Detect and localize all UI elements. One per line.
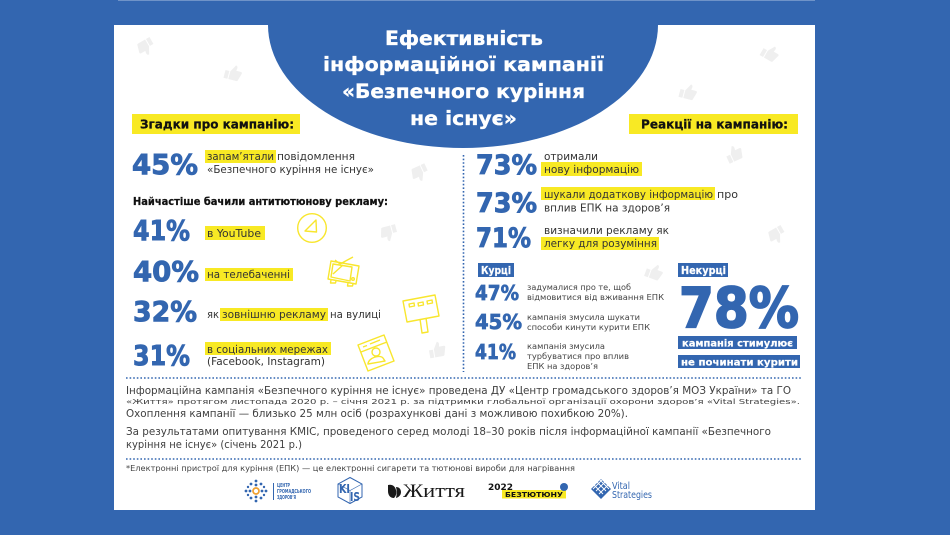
stat: 45% remembered: «Безпечного куріння не існує» — [207, 164, 374, 176]
stat: 47% smokers: відмовитися від вживання ЕПК — [527, 293, 664, 302]
stat: 71% easy: визначили рекламу як — [544, 226, 669, 237]
icon: television — [328, 257, 359, 286]
divider: vertical dotted — [462, 155, 464, 372]
logo: KIIS: KI — [339, 482, 350, 496]
logo: KIIS: IS — [350, 490, 360, 504]
stat: 73% new info — [476, 150, 642, 181]
text block: campaign description: Охоплення кампанії — близько 25 млн осіб (розрахункові дані з можливою похибкою 20%). — [126, 408, 628, 420]
stat: 41% smokers — [475, 340, 629, 371]
stat: 41% YouTube: в YouTube — [207, 229, 261, 240]
title banner: не існує» — [410, 107, 517, 130]
stat: 32% outdoor: на вулиці — [330, 309, 381, 321]
icon: play button — [298, 214, 326, 242]
logo: 2022 tobacco free: БЕЗТЮТЮНУ — [505, 491, 564, 499]
stat: 73% sought info: 73% — [476, 188, 537, 219]
stat: 73% new info: 73% — [476, 150, 537, 181]
logo: public health center: ГРОМАДСЬКОГО — [277, 489, 311, 495]
stat: 45% smokers: способи кинути курити ЕПК — [527, 323, 650, 332]
stat: 45% remembered: повідомлення — [277, 151, 355, 163]
stat: 31% social: 31% — [133, 339, 190, 372]
panel: white card — [114, 25, 815, 510]
stat: 78% non-smokers — [678, 276, 800, 368]
stat: 45% remembered: 45% — [132, 148, 198, 181]
stat: 41% YouTube: 41% — [133, 214, 190, 247]
text block: campaign description — [126, 385, 800, 451]
stat: 31% social — [133, 339, 331, 372]
stat: 78% non-smokers: не починати курити — [681, 358, 798, 368]
subheading: most seen: Найчастіше бачили антитютюнову рекламу: — [133, 196, 388, 208]
stat: 71% easy: легку для розуміння — [544, 238, 657, 250]
stat: 71% easy — [476, 223, 669, 254]
stat: 73% new info: отримали — [544, 152, 598, 163]
stat: 32% outdoor: зовнішню рекламу — [222, 309, 326, 321]
stat: 78% non-smokers: кампанія стимулює — [682, 338, 793, 350]
text block: campaign description: «Життя» протягом листопада 2020 р. – січня 2021 р. за підтримки глобальної організації охорони здоров’я «Vital Strategies». — [126, 397, 800, 406]
stat: 47% smokers — [475, 281, 664, 305]
stat: 45% remembered — [132, 148, 374, 181]
title banner: інформаційної кампанії — [323, 53, 604, 76]
stat: 73% sought info: шукали додаткову інформацію — [544, 189, 713, 201]
stat: 71% easy: 71% — [476, 223, 531, 254]
logo: public health center — [245, 480, 311, 502]
text block: campaign description: куріння не існує» (січень 2021 р.) — [126, 439, 302, 451]
stat: 41% smokers: ЕПК на здоров’я — [527, 362, 598, 371]
label: non-smokers: Некурці — [681, 265, 726, 277]
stat: 47% smokers: 47% — [475, 281, 519, 305]
stat: 32% outdoor — [133, 295, 381, 328]
logo: Zhyttia: Життя — [403, 481, 465, 502]
title banner: Ефективність — [385, 27, 543, 50]
icons: background thumbs — [135, 37, 788, 358]
heading: mentions — [132, 114, 300, 134]
stat: 32% outdoor: 32% — [133, 295, 197, 328]
icon: billboard — [403, 295, 439, 333]
stat: 31% social: (Facebook, Instagram) — [207, 357, 325, 368]
logo: Vital Strategies: Strategies — [612, 490, 652, 501]
title banner — [268, 25, 658, 148]
stat: 47% smokers: задумалися про те, щоб — [527, 283, 631, 292]
logo: 2022 tobacco free: 2022 — [488, 483, 513, 493]
stat: 40% TV: 40% — [133, 255, 199, 288]
text block: campaign description: За результатами опитування КМІС, проведеного серед молоді 18–30 років після інформаційної кампанії «Безпечного — [126, 426, 771, 438]
icon: profile window — [358, 335, 394, 371]
heading: reactions — [629, 114, 798, 134]
logo: Zhyttia — [388, 481, 465, 502]
logo: 2022 tobacco free — [488, 483, 568, 499]
stat: 41% YouTube — [133, 214, 265, 247]
heading: reactions: Реакції на кампанію: — [641, 118, 788, 132]
logo: public health center: ЗДОРОВ’Я — [277, 495, 296, 501]
title banner: «Безпечного куріння — [342, 80, 585, 103]
stat: 73% new info: нову інформацію — [544, 164, 639, 176]
stat: 78% non-smokers: 78% — [679, 276, 799, 340]
stat: 40% TV: на телебаченні — [207, 269, 290, 281]
stat: 31% social: в соціальних мережах — [207, 344, 328, 356]
stat: 73% sought info — [476, 187, 738, 219]
stat: 41% smokers: турбуватися про вплив — [527, 352, 629, 361]
logo: Vital Strategies: Vital — [612, 481, 630, 492]
stat: 45% remembered: запам’ятали — [207, 152, 274, 163]
stat: 41% smokers: кампанія змусила — [527, 342, 605, 351]
logo: KIIS — [338, 478, 362, 504]
stat: 73% sought info: вплив ЕПК на здоров’я — [544, 204, 670, 214]
stat: 45% smokers: 45% — [475, 310, 522, 334]
stat: 40% TV — [133, 255, 293, 288]
logo: public health center: ЦЕНТР — [277, 483, 290, 489]
stat: 73% sought info: про — [717, 190, 738, 201]
stat: 32% outdoor: як — [207, 310, 219, 321]
stat: 45% smokers: кампанія змусила шукати — [527, 313, 640, 322]
label: smokers: Курці — [481, 265, 511, 277]
heading: mentions: Згадки про кампанію: — [140, 118, 294, 132]
stat: 45% smokers — [475, 310, 650, 334]
stat: 41% smokers: 41% — [475, 340, 516, 364]
footnote: *Електронні пристрої для куріння (ЕПК) — це електронні сигарети та тютюнові вироби для нагрівання — [126, 464, 575, 473]
logo: Vital Strategies — [591, 479, 652, 501]
text block: campaign description: Інформаційна кампанія «Безпечного куріння не існує» проведена ДУ «Центр громадського здоров’я МОЗ України» та ГО — [126, 385, 791, 397]
